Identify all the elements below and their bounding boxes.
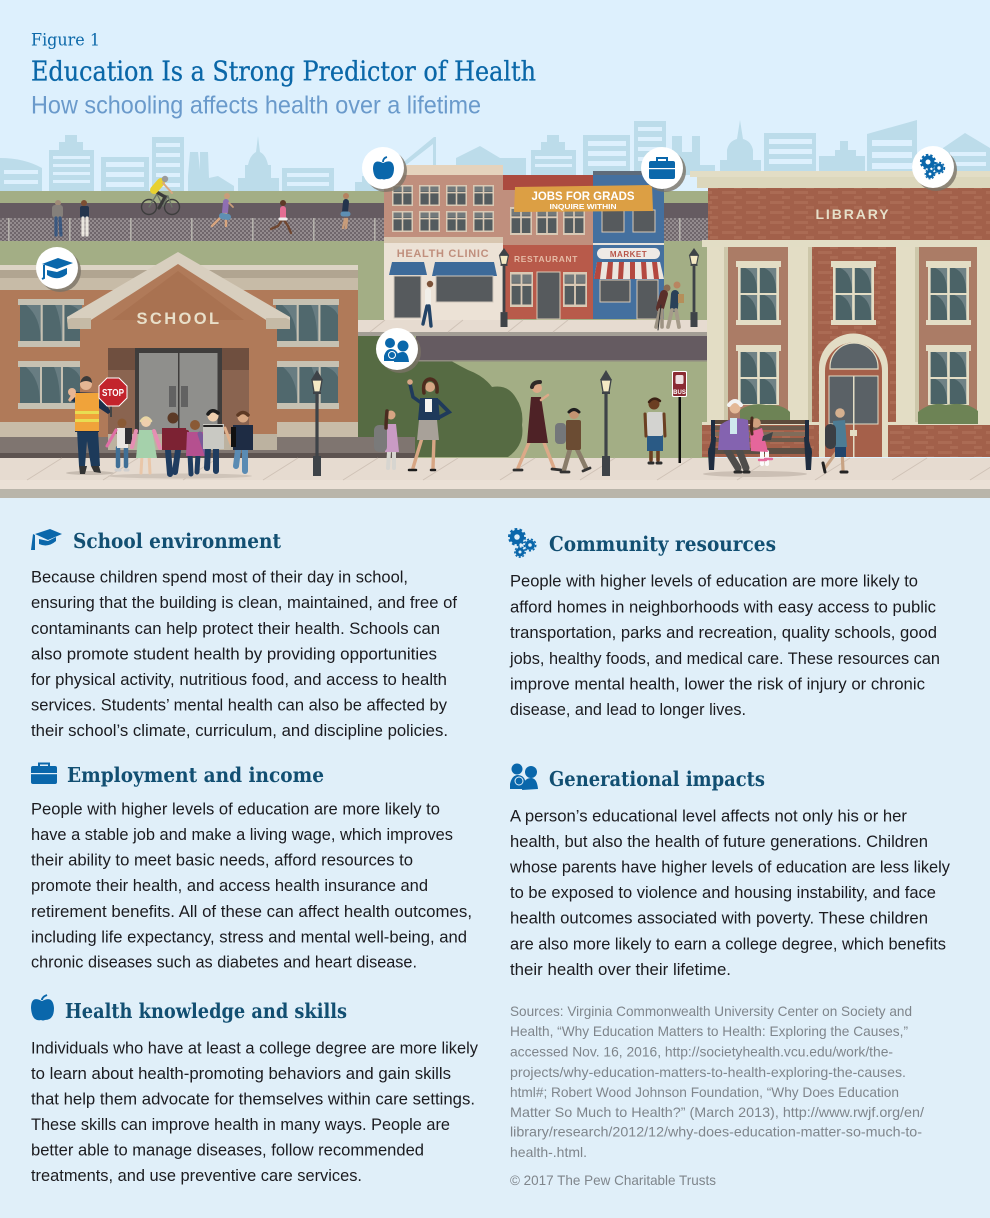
people: teacher and girl [374, 379, 449, 470]
school sign: SCHOOL [137, 310, 221, 328]
title block [31, 30, 536, 120]
heading: Health knowledge and skills [65, 999, 347, 1023]
title block: Figure 1 [31, 30, 100, 50]
grandmother [718, 401, 750, 472]
bus stop sign [672, 371, 687, 463]
building: restaurant [503, 175, 593, 319]
sources: html#; Robert Wood Johnson Foundation, “Why Does Education [510, 1085, 899, 1100]
panel: employment and income [31, 763, 472, 972]
building: health clinic [384, 165, 503, 320]
banner: jobs for grads: JOBS FOR GRADS [532, 189, 634, 203]
child 1 [107, 418, 132, 470]
text block: health, but also the health of future generations. Children [510, 832, 928, 851]
icon: graduation cap [31, 529, 62, 550]
people: crossing guard [66, 376, 127, 475]
base course [702, 424, 990, 457]
building: library [690, 171, 990, 457]
sources: projects/why-education-matters-to-health-exploring-the-causes. [510, 1065, 906, 1080]
text block: to learn about health-promoting behaviors and gain skills [31, 1064, 451, 1083]
panel: health knowledge and skills [31, 995, 479, 1185]
heading: School environment [73, 529, 281, 553]
text block: transportation, parks and recreation, quality schools, good [510, 623, 937, 642]
building: school [0, 252, 358, 450]
illustration: city street scene [0, 120, 990, 498]
building: market: MARKET [610, 250, 647, 259]
text block: chronic diseases such as diabetes and heart disease. [31, 952, 417, 972]
sources: Health, “Why Education Matters to Health: Exploring the Causes,” [510, 1024, 908, 1039]
text block: contaminants can help protect their health. Schools can [31, 619, 440, 638]
bench [708, 420, 812, 470]
girl with backpack [374, 410, 399, 468]
text block: their ability to meet basic needs, afford resources to [31, 850, 413, 870]
text block: are also more likely to earn a college degree, which benefits [510, 934, 946, 953]
sources: library/research/2012/12/why-does-education-matter-so-much-to- [510, 1125, 922, 1140]
text block [31, 800, 472, 972]
entrance gable [80, 262, 277, 437]
icon badge: briefcase [641, 147, 686, 192]
icon: briefcase [31, 764, 57, 784]
base [0, 422, 108, 437]
text block: Because children spend most of their day in school, [31, 568, 408, 586]
bushes [740, 404, 790, 423]
dark pavement [0, 437, 108, 454]
green hill [0, 191, 710, 461]
lower road behind upper sidewalk [416, 336, 710, 361]
sources [510, 1004, 924, 1160]
icon badge: gears [912, 146, 957, 191]
text block: services. Students’ mental health can also be affected by [31, 696, 448, 714]
text block: A person’s educational level affects not only his or her [510, 807, 907, 826]
icon badge: people [376, 328, 421, 373]
icon: gears [509, 529, 536, 557]
banner: jobs for grads: INQUIRE WITHIN [550, 202, 616, 211]
upper sidewalk [358, 320, 708, 336]
child 2 [132, 417, 160, 473]
text block: whose parents have higher levels of education are less likely [509, 858, 951, 877]
icon badge: apple [362, 147, 407, 192]
panel: community resources [509, 529, 940, 719]
school windows [18, 299, 84, 305]
bushes behind the school wall [358, 324, 522, 457]
bench with seated people [703, 401, 812, 477]
text block: have a stable job and make a living wage, which improves [31, 825, 453, 844]
skyline windows [4, 127, 986, 187]
copyright: © 2017 The Pew Charitable Trusts [510, 1173, 716, 1188]
panel: school environment [31, 529, 457, 740]
text block [509, 572, 940, 719]
building: health clinic: HEALTH CLINIC [397, 248, 489, 260]
text block: afford homes in neighborhoods with easy access to public [510, 598, 936, 616]
heading: Employment and income [67, 763, 324, 787]
icon badge: graduation cap [36, 247, 81, 292]
street lamps [311, 248, 699, 476]
text block: disease, and lead to longer lives. [510, 700, 746, 719]
title block: Education Is a Strong Predictor of Health [31, 56, 536, 88]
sources: health-.html. [510, 1145, 587, 1160]
people: boy walking at library [823, 408, 847, 472]
text block: for physical activity, nutritious food, and access to health [31, 670, 447, 689]
text block [509, 807, 951, 979]
text block: retirement benefits. All of these can affect health outcomes, [31, 902, 472, 921]
upper path [0, 203, 710, 241]
people: woman on phone and boy [514, 382, 590, 472]
sources: Matter So Much to Health?” (March 2013), http://www.rwjf.org/en/ [510, 1105, 924, 1120]
text block: including life expectancy, stress and mental well-being, and [31, 927, 467, 946]
people: couple on upper sidewalk [656, 282, 684, 330]
text block: ensuring that the building is clean, maintained, and free of [31, 593, 457, 612]
bus stop sign: BUS [673, 390, 686, 396]
building: market [593, 171, 664, 319]
people: walkers on upper path [52, 200, 89, 235]
text block: their health over their lifetime. [510, 960, 731, 979]
people: boy at bus stop [645, 398, 665, 463]
heading: Generational impacts [549, 767, 765, 791]
people: man at clinic [423, 281, 433, 326]
text block: promote their health, and access health insurance and [31, 876, 428, 895]
entrance [108, 348, 249, 448]
girl reading [750, 418, 773, 464]
banner: jobs for grads [514, 185, 653, 212]
text block: their school’s climate, curriculum, and discipline policies. [31, 721, 448, 740]
text block: People with higher levels of education are more likely to [510, 572, 918, 591]
text block: treatments, and use preventive care services. [31, 1166, 362, 1185]
text block [31, 568, 457, 740]
icon: people [510, 764, 538, 790]
background: lower page [0, 498, 990, 1218]
text block: health outcomes associated with poverty. These children [510, 909, 928, 928]
text block: These skills can improve health in many ways. People are [31, 1115, 450, 1134]
teacher [407, 379, 449, 470]
striped awning [594, 262, 664, 279]
people: schoolchildren [107, 410, 253, 478]
child 6 [231, 412, 253, 471]
text block: to be exposed to violence and housing instability, and face [510, 883, 936, 902]
icon: apple [31, 995, 54, 1020]
people: runners [212, 193, 349, 233]
child 3 [162, 412, 188, 474]
text block: improve mental health, lower the risk of injury or chronic [510, 674, 925, 693]
heading: Community resources [549, 532, 776, 556]
library windows [736, 261, 781, 267]
title block: How schooling affects health over a lifetime [31, 92, 481, 120]
chain-link fence [0, 218, 710, 241]
building: library: LIBRARY [815, 206, 891, 222]
sources: accessed Nov. 16, 2016, http://societyhealth.vcu.edu/work/the- [510, 1045, 893, 1060]
text block: Individuals who have at least a college degree are more likely [31, 1038, 479, 1057]
main sidewalk [0, 458, 990, 498]
columns [707, 247, 728, 423]
people: cyclist [142, 176, 180, 214]
panel: generational impacts [509, 764, 951, 979]
arched door [819, 334, 888, 457]
text block: jobs, healthy foods, and medical care. These resources can [509, 649, 940, 668]
text block: People with higher levels of education are more likely to [31, 800, 440, 818]
child 5 [203, 410, 231, 471]
stop sign: STOP [102, 388, 124, 399]
text block: better able to manage diseases, follow recommended [31, 1141, 424, 1160]
text block [31, 1038, 479, 1185]
background: sky [0, 0, 990, 500]
sources: Sources: Virginia Commonwealth University Center on Society and [510, 1004, 912, 1019]
text block: that help them advocate for themselves within care settings. [31, 1089, 475, 1108]
text block: also promote student health by providing opportunities [31, 644, 437, 664]
building: restaurant: RESTAURANT [514, 254, 578, 264]
skyline [0, 120, 990, 191]
child 4 [186, 420, 208, 474]
